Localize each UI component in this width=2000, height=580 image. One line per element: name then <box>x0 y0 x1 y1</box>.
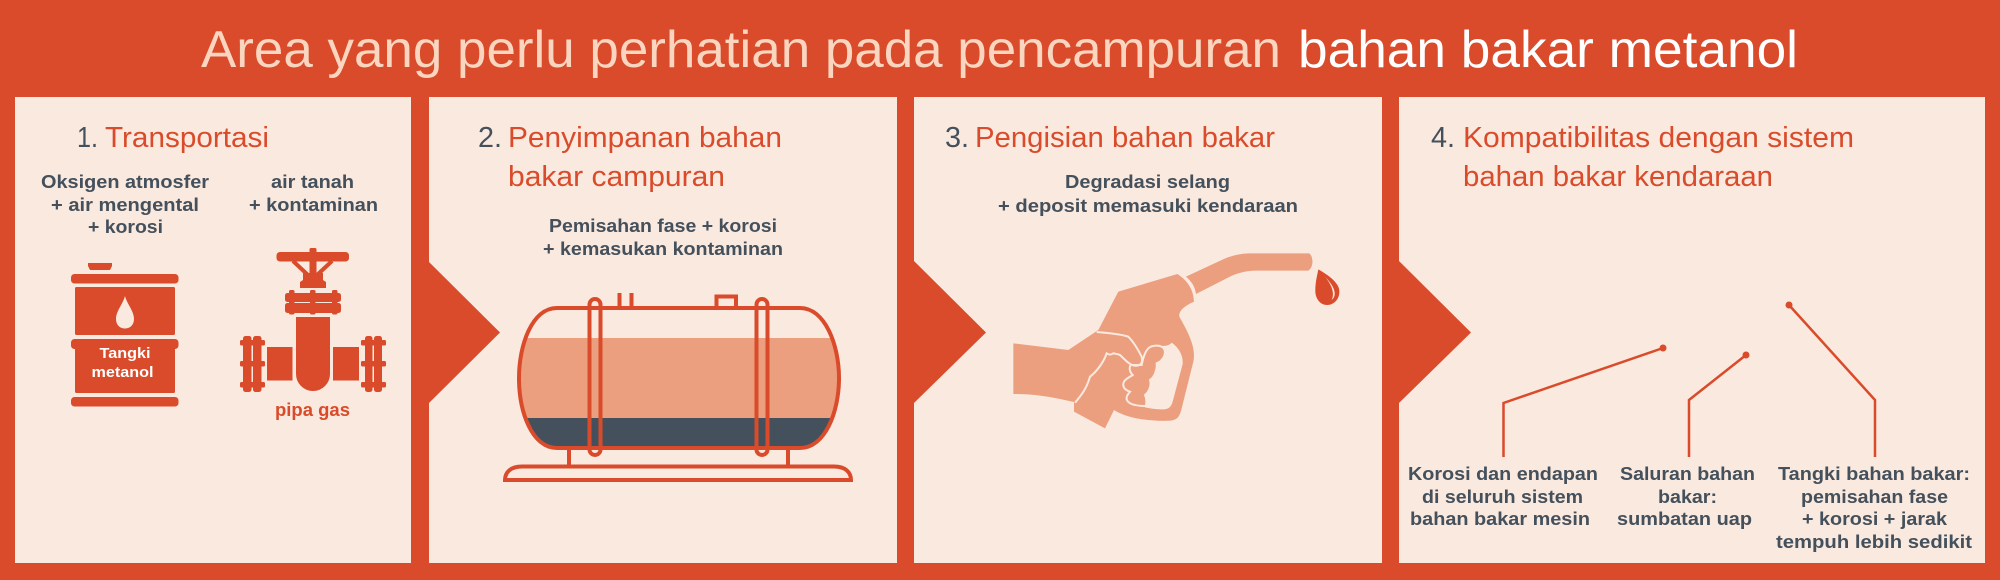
text: phase separation <box>543 215 783 259</box>
callout line: fuel line <box>1689 352 1750 457</box>
text: fuel tank <box>1776 463 1972 552</box>
arrow into panel 3 <box>914 261 986 403</box>
text: phase separation: + kemasukan kontaminan <box>543 238 783 259</box>
text: corrosion and deposits: di seluruh sistem <box>1422 486 1583 507</box>
arrow into panel 2 <box>429 262 500 403</box>
title: Area yang perlu perhatian pada pencampuran <box>201 21 1281 79</box>
icon: methanol drum: Tangki <box>100 345 150 362</box>
title: bahan bakar metanol <box>1298 21 1798 79</box>
heading: 2. Penyimpanan bahan bakar campuran: 2. <box>478 122 502 154</box>
callout line: fuel tank <box>1786 302 1875 457</box>
panel: transportasi <box>15 97 411 563</box>
callout line: engine <box>1504 344 1666 457</box>
icon: methanol drum: metanol <box>92 364 154 381</box>
icon: methanol drum <box>71 263 178 406</box>
text: oxygen, water, corrosion: Oksigen atmosfer <box>41 171 209 192</box>
text: corrosion and deposits: bahan bakar mesin <box>1410 508 1590 529</box>
icon: hand holding fuel nozzle <box>1013 253 1339 428</box>
arrow into panel 4 <box>1399 261 1471 403</box>
text: fuel line vapor lock <box>1617 463 1755 529</box>
heading: 4. Kompatibilitas dengan sistem bahan bakar kendaraan <box>1431 122 1854 193</box>
text: fuel line vapor lock: sumbatan uap <box>1617 508 1752 529</box>
heading: 4. Kompatibilitas dengan sistem bahan bakar kendaraan: bahan bakar kendaraan <box>1463 161 1773 193</box>
heading: 3. Pengisian bahan bakar: Pengisian bahan bakar <box>975 122 1275 154</box>
heading: 4. Kompatibilitas dengan sistem bahan bakar kendaraan: 4. <box>1431 122 1455 154</box>
text: hose degradation <box>998 171 1298 216</box>
icon: gas pipe valve <box>240 248 386 392</box>
heading: 2. Penyimpanan bahan bakar campuran: bakar campuran <box>508 161 725 193</box>
text: groundwater, contaminants: air tanah <box>271 171 354 192</box>
text: fuel line vapor lock: Saluran bahan <box>1620 463 1755 484</box>
text: phase separation: Pemisahan fase + korosi <box>549 215 777 236</box>
text: oxygen, water, corrosion: + korosi <box>88 216 163 237</box>
heading: 1. Transportasi: 1. <box>77 122 98 154</box>
text: corrosion and deposits <box>1408 463 1598 529</box>
text: fuel line vapor lock: bakar: <box>1658 486 1717 507</box>
heading: 1. Transportasi: Transportasi <box>105 122 269 154</box>
text: hose degradation: + deposit memasuki kendaraan <box>998 195 1298 216</box>
text: groundwater, contaminants: + kontaminan <box>249 194 378 215</box>
text: fuel tank: + korosi + jarak <box>1802 508 1948 529</box>
panel: kompatibilitas <box>1399 97 1985 563</box>
icon: storage tank <box>505 293 851 480</box>
text: hose degradation: Degradasi selang <box>1065 171 1230 192</box>
heading: 4. Kompatibilitas dengan sistem bahan bakar kendaraan: Kompatibilitas dengan sistem <box>1463 122 1854 154</box>
heading: 2. Penyimpanan bahan bakar campuran: Penyimpanan bahan <box>508 122 782 154</box>
label: gas pipe: pipa gas <box>275 400 350 420</box>
panel: pengisian <box>914 97 1382 563</box>
title <box>201 21 1798 79</box>
text: fuel tank: pemisahan fase <box>1801 486 1948 507</box>
text: oxygen, water, corrosion <box>41 171 209 237</box>
text: groundwater, contaminants <box>249 171 378 215</box>
text: fuel tank: Tangki bahan bakar: <box>1778 463 1970 484</box>
text: oxygen, water, corrosion: + air mengental <box>51 194 199 215</box>
heading: 2. Penyimpanan bahan bakar campuran <box>478 122 782 193</box>
text: fuel tank: tempuh lebih sedikit <box>1776 531 1972 552</box>
text: corrosion and deposits: Korosi dan endapan <box>1408 463 1598 484</box>
heading: 3. Pengisian bahan bakar: 3. <box>945 122 969 154</box>
panel: penyimpanan <box>429 97 897 563</box>
